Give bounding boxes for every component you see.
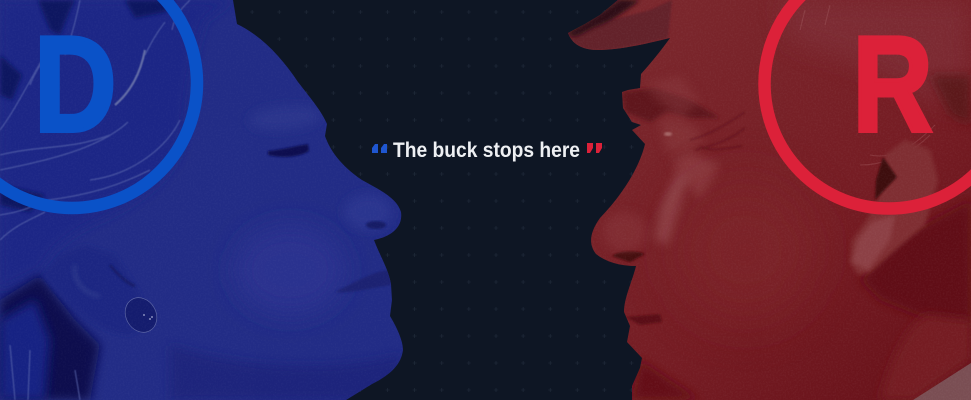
ring [764,0,971,208]
letter D: D [34,8,117,160]
ear [46,263,136,288]
light hair strands [0,0,190,400]
portrait: Democratic candidate in blue [0,0,420,400]
dotted grid [235,0,645,400]
letter R: R [852,9,933,161]
opening quote mark [372,144,387,153]
ring [0,0,197,208]
quote text: The buck stops here [393,139,580,162]
neck shading [880,315,971,400]
hair [0,0,190,400]
dark area behind ear [862,201,970,316]
party badge: Republican [764,0,971,208]
dark hair pockets [0,0,175,212]
eye [268,144,309,157]
party badge: Democrat [0,0,197,208]
nose and mouth shading [603,212,662,325]
shirt collar [913,363,971,400]
portrait: Republican candidate in red [560,0,971,400]
brow and wrinkles [622,75,745,200]
hair fringe [560,0,672,50]
earring [124,297,158,333]
facial shading [170,103,400,400]
cheek highlight [655,172,688,245]
closing quote mark [587,143,602,153]
ear [850,140,938,275]
quote [372,139,602,162]
